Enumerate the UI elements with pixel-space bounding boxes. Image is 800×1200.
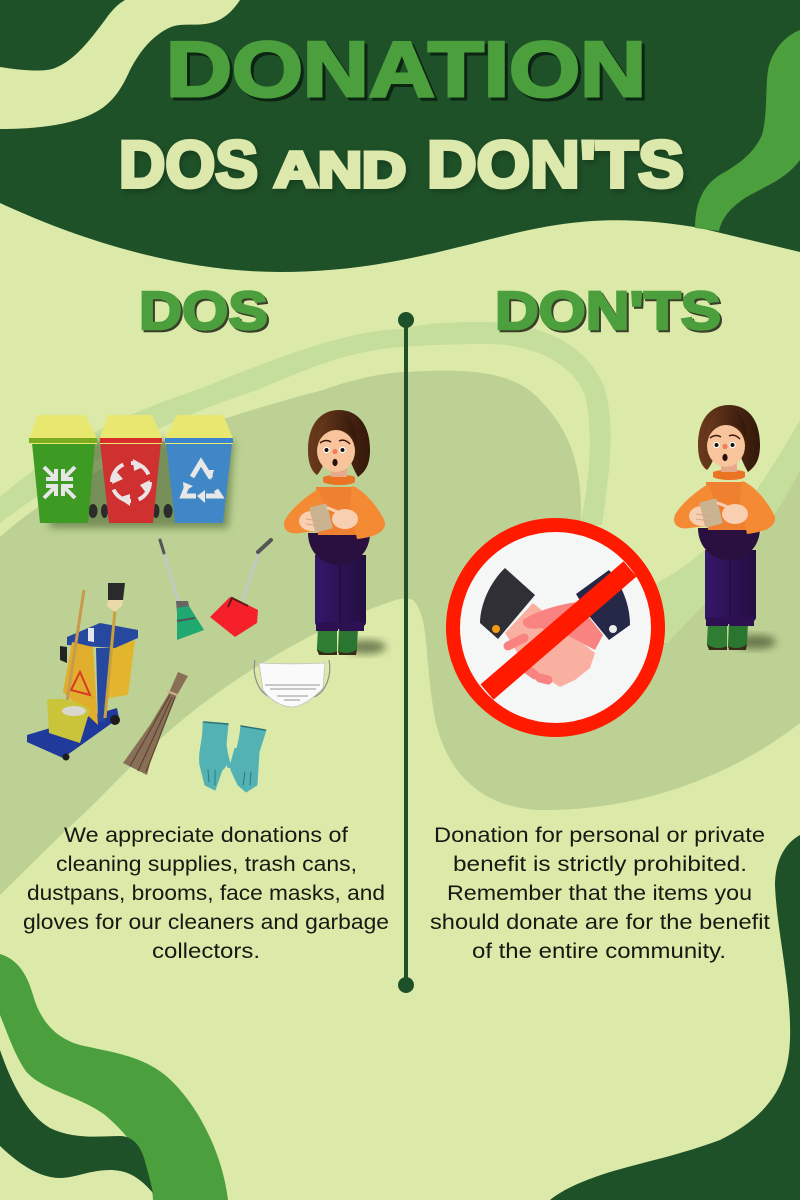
bottom-left dark swoosh bbox=[0, 1050, 153, 1193]
bottle bbox=[88, 628, 94, 642]
icon: janitor cart bbox=[27, 583, 138, 760]
icon: three recycling bins bbox=[29, 415, 234, 528]
yellow wet floor sign bbox=[63, 642, 98, 725]
text block: dos description: We appreciate donations of bbox=[64, 824, 348, 847]
right cuff bbox=[576, 570, 630, 640]
subtitle: DOS AND DON'TS: DOS bbox=[119, 127, 258, 201]
icon: mask bbox=[254, 660, 330, 707]
text block: dos description bbox=[23, 824, 389, 963]
background shape: curved pale band bbox=[0, 322, 611, 525]
icon: push broom bbox=[160, 540, 204, 640]
green bin bbox=[29, 415, 97, 523]
text block: dos description: collectors. bbox=[152, 940, 260, 963]
text block: don'ts description: should donate are for the benefit bbox=[430, 911, 770, 934]
subtitle: DOS AND DON'TS: AND bbox=[274, 142, 406, 198]
text block: dos description: gloves for our cleaners and garbage bbox=[23, 911, 389, 934]
icon: prohibited handshake sign bbox=[453, 525, 658, 730]
center divider with end dots bbox=[398, 312, 414, 993]
text block: dos description: cleaning supplies, trash cans, bbox=[56, 853, 357, 876]
text block: don'ts description: benefit is strictly prohibited. bbox=[453, 853, 747, 876]
text block: dos description: dustpans, brooms, face masks, and bbox=[27, 882, 385, 905]
blue bin bbox=[165, 415, 233, 523]
header dark wave bbox=[0, 0, 800, 272]
top-left light swoosh bbox=[0, 0, 240, 129]
wheels bbox=[88, 504, 172, 518]
yellow bag bbox=[106, 640, 135, 698]
icon: gloves bbox=[200, 722, 266, 792]
heading: DON'TS: DON'TS bbox=[495, 281, 721, 341]
background shape: central sage blob bbox=[0, 371, 800, 895]
blue tray bbox=[67, 623, 138, 648]
icon: whisk broom bbox=[123, 672, 188, 775]
text block: don'ts description: Remember that the items you bbox=[447, 882, 752, 905]
bottom-left green swoosh bbox=[0, 954, 228, 1200]
woman figure, right column bbox=[674, 405, 776, 650]
subtitle: DOS AND DON'TS bbox=[119, 127, 684, 201]
text block: don'ts description: Donation for personal or private bbox=[434, 824, 765, 847]
top-right green swoosh bbox=[695, 30, 800, 231]
heading: DOS: DOS bbox=[139, 281, 268, 341]
cart broom bbox=[105, 610, 115, 718]
background shape: right pale band bbox=[630, 420, 800, 643]
text block: don'ts description bbox=[430, 824, 770, 963]
prohibition bar bbox=[487, 569, 630, 692]
subtitle: DOS AND DON'TS: DON'TS bbox=[427, 127, 684, 201]
hands bbox=[505, 603, 595, 687]
yellow bucket bbox=[47, 699, 90, 743]
bottom-right dark wave bbox=[550, 835, 800, 1200]
left cuff bbox=[480, 568, 535, 639]
title: DONATION: DONATION bbox=[166, 25, 646, 113]
icon: red dustpan bbox=[210, 540, 271, 637]
text block: don'ts description: of the entire community. bbox=[472, 940, 726, 963]
woman figure, left column bbox=[284, 410, 386, 655]
red bin bbox=[100, 415, 162, 523]
mop handle bbox=[66, 590, 84, 708]
